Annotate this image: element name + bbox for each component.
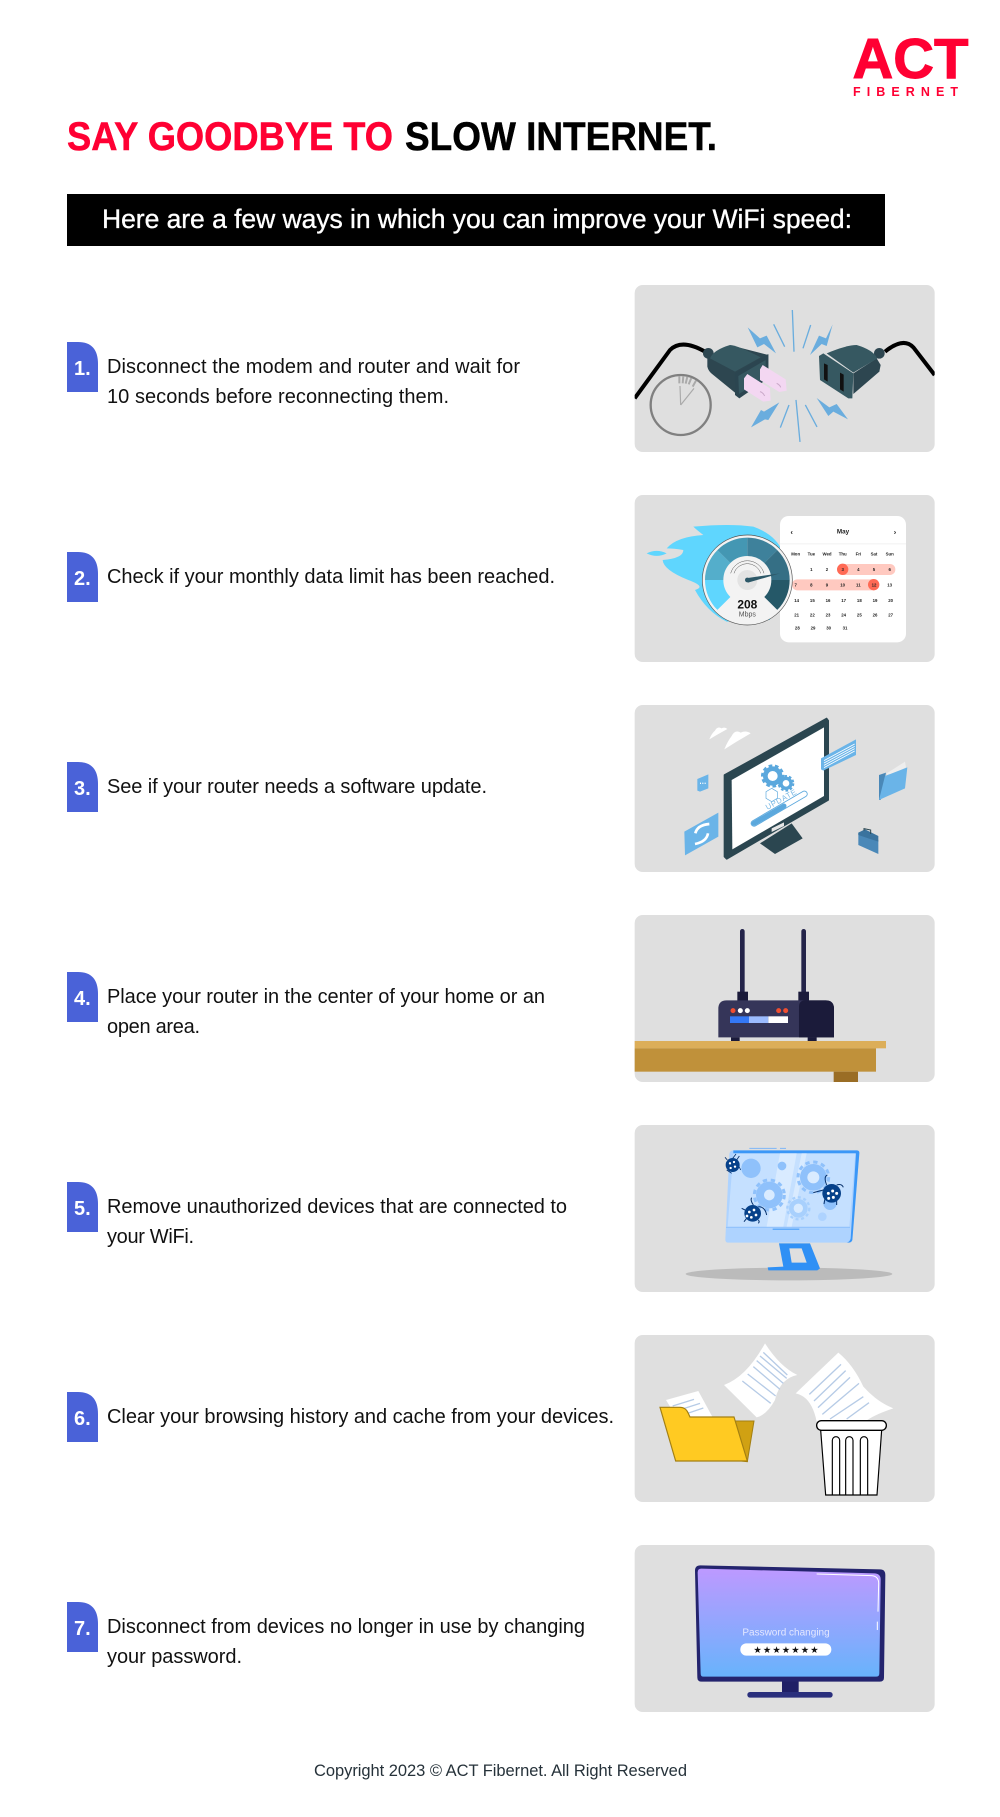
calendar: 22 [810, 612, 815, 617]
step 2: 2. [74, 568, 91, 590]
panel: software update monitor [635, 705, 935, 872]
calendar: 7 [794, 583, 797, 588]
calendar: May [837, 529, 850, 536]
calendar: 18 [857, 598, 862, 603]
desk [635, 1041, 886, 1082]
calendar: 21 [794, 612, 800, 617]
step 6: Clear your browsing history and cache from your devices. [107, 1406, 614, 1428]
step 5: 5. [74, 1198, 91, 1220]
calendar: 6 [888, 567, 891, 572]
step 5 [67, 1182, 567, 1248]
calendar: 2 [826, 567, 829, 572]
step 7: your password. [107, 1646, 242, 1668]
icon: bugs [725, 1154, 843, 1223]
step 6: 6. [74, 1408, 91, 1430]
icon: folder [660, 1407, 754, 1462]
calendar: Sun [886, 552, 894, 557]
calendar: 23 [826, 612, 831, 617]
calendar: 16 [826, 598, 831, 603]
calendar: 12 [872, 583, 877, 588]
step 7: 7. [74, 1618, 91, 1640]
gears and update progress: UPDATE [764, 787, 798, 812]
calendar: 15 [810, 598, 815, 603]
step 2 [67, 552, 555, 602]
panel: unplugged cable illustration [635, 285, 935, 452]
gears and update progress [754, 766, 804, 823]
calendar: 4 [857, 567, 860, 572]
password field: ★★★★★★★ [753, 1645, 819, 1656]
step 5: your WiFi. [107, 1226, 194, 1248]
icon: flying paper [724, 1343, 797, 1417]
step 1: 10 seconds before reconnecting them. [107, 386, 449, 408]
calendar: 29 [811, 626, 816, 631]
speedometer: Mbps [739, 611, 756, 618]
calendar: 25 [857, 612, 862, 617]
calendar: 19 [873, 598, 878, 603]
step 3: 3. [74, 778, 91, 800]
calendar: 3 [841, 567, 844, 572]
panel: folder, papers and trash [635, 1335, 935, 1502]
calendar: 5 [873, 567, 876, 572]
gears and circles [741, 1159, 837, 1221]
step 5: Remove unauthorized devices that are connected to [107, 1196, 567, 1218]
logo: ACT Fibernet: ACT [852, 27, 969, 91]
icon: paper into trash [796, 1353, 893, 1422]
step 3: See if your router needs a software update. [107, 776, 487, 798]
password field [740, 1627, 831, 1656]
calendar: 13 [887, 583, 893, 588]
calendar: 26 [873, 612, 878, 617]
step 3 [67, 762, 487, 812]
step 1: 1. [74, 358, 91, 380]
panel: router on desk [635, 915, 935, 1082]
title: SLOW INTERNET. [405, 115, 717, 159]
calendar: 14 [794, 598, 800, 603]
logo: ACT Fibernet: FIBERNET [853, 85, 958, 99]
calendar: ‹ [790, 527, 793, 536]
calendar: 11 [856, 583, 861, 588]
calendar [780, 516, 906, 642]
calendar: 24 [841, 612, 847, 617]
step 1 [67, 342, 520, 408]
calendar: 8 [810, 583, 813, 588]
calendar: 20 [888, 598, 894, 603]
calendar: Sat [871, 552, 878, 557]
password field: Password changing [742, 1627, 830, 1638]
step 2: Check if your monthly data limit has been reached. [107, 566, 555, 588]
calendar: Thu [839, 552, 847, 557]
speedometer [702, 535, 792, 625]
panel: speedometer and calendar [635, 495, 935, 662]
panel: password change monitor [635, 1545, 935, 1712]
calendar: Tue [808, 552, 816, 557]
title: SAY GOODBYE TO [67, 115, 393, 159]
calendar: 27 [888, 612, 894, 617]
calendar: 30 [826, 626, 832, 631]
step 4: 4. [74, 988, 91, 1010]
subtitle banner [67, 194, 885, 246]
step 4 [67, 972, 545, 1038]
icon: clock [651, 375, 711, 435]
calendar: 28 [795, 626, 800, 631]
footer copyright: Copyright 2023 © ACT Fibernet. All Right Reserved [314, 1762, 687, 1780]
step 4: Place your router in the center of your home or an [107, 986, 545, 1008]
calendar: Mon [791, 552, 800, 557]
step 4: open area. [107, 1016, 200, 1038]
step 7: Disconnect from devices no longer in use by changing [107, 1616, 585, 1638]
step 1: Disconnect the modem and router and wait for [107, 356, 520, 378]
subtitle banner: Here are a few ways in which you can improve your WiFi speed: [102, 204, 852, 234]
title [67, 115, 717, 159]
speedometer: 208 [737, 598, 758, 612]
calendar: 10 [840, 583, 846, 588]
panel: computer with bugs [635, 1125, 935, 1292]
calendar: Wed [822, 552, 832, 557]
calendar: 17 [841, 598, 847, 603]
calendar: 31 [843, 626, 848, 631]
icon: trash bin [817, 1421, 886, 1495]
step 7 [67, 1602, 585, 1668]
calendar: Fri [856, 552, 861, 557]
calendar: 9 [826, 583, 829, 588]
calendar: › [894, 527, 897, 536]
calendar: 1 [810, 567, 813, 572]
step 6 [67, 1392, 614, 1442]
